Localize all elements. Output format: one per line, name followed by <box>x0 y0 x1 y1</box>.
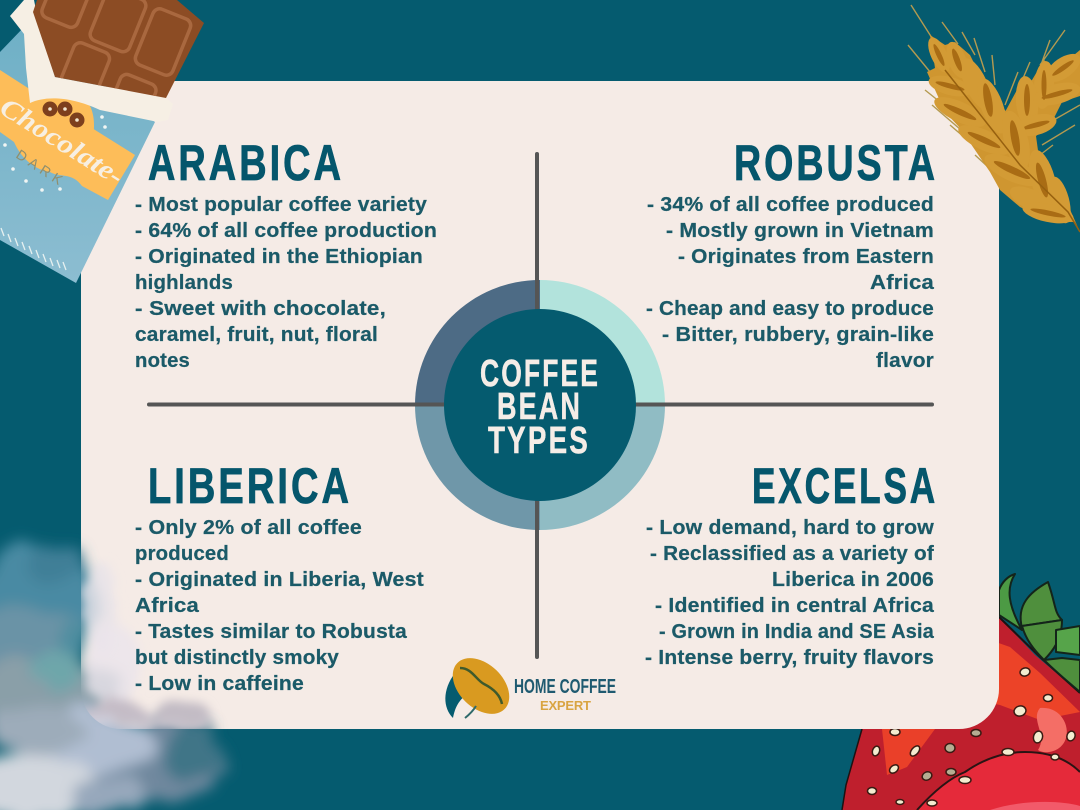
body text: - Originates from Eastern <box>678 245 934 268</box>
body text: - Only 2% of all coffee <box>135 516 362 539</box>
body text: notes <box>135 349 190 372</box>
center title <box>480 353 600 462</box>
gold band <box>0 70 135 200</box>
body text: - Reclassified as a variety of <box>650 542 934 565</box>
body text <box>646 193 934 372</box>
section: Robusta <box>646 135 938 372</box>
body text: - Intense berry, fruity flavors <box>645 646 934 669</box>
ring quadrant bottom right <box>540 405 665 530</box>
wheat ear right <box>1005 48 1080 165</box>
illustration: strawberry <box>842 574 1080 810</box>
body text: flavor <box>876 349 934 372</box>
wheat ear left <box>924 34 1080 232</box>
section: Arabica <box>135 135 437 372</box>
body text: - 64% of all coffee production <box>135 219 437 242</box>
wrapper crimp <box>1 228 66 270</box>
body text: - Originated in Liberia, West <box>135 568 424 591</box>
body text: produced <box>135 542 229 565</box>
foil <box>10 0 173 122</box>
icon: coffee bean <box>442 647 520 725</box>
ring quadrant top left <box>415 280 540 405</box>
body text: highlands <box>135 271 233 294</box>
illustration: wheat <box>908 5 1080 232</box>
logo wordmark: HOME COFFEE <box>514 676 616 698</box>
chocolate grooves <box>40 0 192 96</box>
divider lines <box>147 278 934 659</box>
section: Liberica <box>135 458 424 695</box>
body text: Africa <box>870 271 934 294</box>
body text: caramel, fruit, nut, floral <box>135 323 378 346</box>
heading: ROBUSTA <box>734 135 938 191</box>
body text: Liberica in 2006 <box>772 568 934 591</box>
body text: Africa <box>135 594 199 617</box>
illustration: chocolate bar <box>0 0 204 283</box>
icon: flowers <box>42 102 84 128</box>
center title: TYPES <box>488 420 590 462</box>
wrapper dots <box>3 115 107 192</box>
illustration: clouds <box>0 544 230 810</box>
body text <box>135 193 437 372</box>
divider: vertical top <box>535 152 539 282</box>
icon: strawberry leaves <box>999 574 1080 692</box>
wheat awns <box>908 5 1080 178</box>
body text: - Mostly grown in Vietnam <box>666 219 934 242</box>
icon: strawberry seeds <box>868 667 1076 806</box>
heading: ARABICA <box>148 135 344 191</box>
body text: - Most popular coffee variety <box>135 193 427 216</box>
body text: - Grown in India and SE Asia <box>659 620 934 643</box>
chocolate <box>33 0 204 98</box>
center title: BEAN <box>497 386 582 428</box>
body text: - 34% of all coffee produced <box>647 193 934 216</box>
ring quadrant bottom left <box>415 405 540 530</box>
body text: - Cheap and easy to produce <box>646 297 934 320</box>
body text: - Sweet with chocolate, <box>135 297 386 320</box>
center circle <box>444 309 636 501</box>
body text: - Bitter, rubbery, grain-like <box>662 323 934 346</box>
body text <box>135 516 424 695</box>
wrapper <box>0 26 155 283</box>
body text: - Identified in central Africa <box>655 594 934 617</box>
heading: LIBERICA <box>148 458 352 514</box>
body text: - Originated in the Ethiopian <box>135 245 423 268</box>
logo: Home Coffee Expert <box>442 647 616 725</box>
heading: EXCELSA <box>752 458 938 514</box>
logo subtitle: EXPERT <box>540 698 591 713</box>
panel: main card <box>81 81 999 729</box>
center graphic <box>147 278 934 659</box>
body text: - Low in caffeine <box>135 672 304 695</box>
center title: COFFEE <box>480 353 600 395</box>
section: Excelsa <box>645 458 938 669</box>
ring quadrant top right <box>540 280 665 405</box>
body text <box>645 516 934 669</box>
body text: - Tastes similar to Robusta <box>135 620 407 643</box>
wheat stalk <box>945 70 1080 232</box>
body text: but distinctly smoky <box>135 646 339 669</box>
body text: - Low demand, hard to grow <box>646 516 934 539</box>
wrapper DARK label: DARK <box>13 146 66 188</box>
